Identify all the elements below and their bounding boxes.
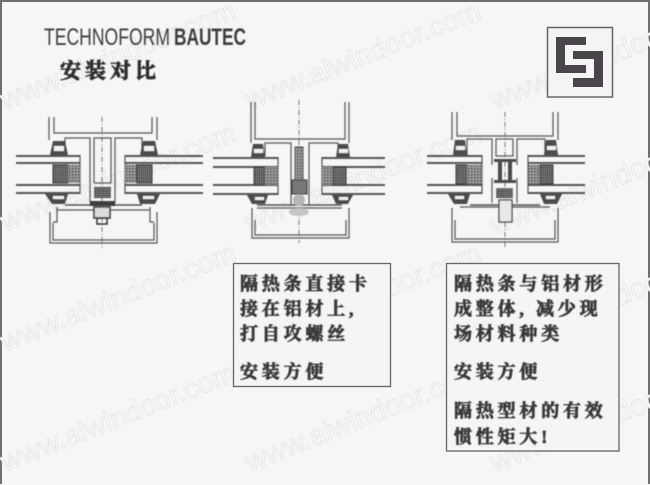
- text box: integrated profile note: 成整体, 减少现: [454, 298, 601, 319]
- glass panels: [427, 156, 585, 193]
- watermarks: www.alwindoor.com: [0, 117, 240, 239]
- text box: screw-fixed note: 接在铝材上,: [240, 299, 357, 319]
- glass panels: [16, 156, 203, 193]
- bolt and clip: [94, 187, 111, 198]
- thermal break bars: [494, 159, 516, 183]
- upper mullion: [251, 102, 349, 190]
- centre line: [298, 100, 300, 243]
- centre line: [504, 112, 506, 247]
- text box: integrated profile note: 惯性矩大!: [454, 427, 551, 447]
- watermarks: www.alwindoor.com: [240, 117, 485, 239]
- diagram: middle section, self-tapping screw: [213, 100, 385, 243]
- self-tapping screw: [295, 147, 303, 180]
- lower profile and cover: [452, 178, 558, 242]
- title: TECHNOFORM BAUTEC: BAUTEC: [174, 24, 246, 51]
- insulating spacers: [456, 165, 467, 184]
- text box: integrated profile note: [446, 264, 619, 451]
- gaskets: [247, 144, 353, 204]
- upper mullion: [49, 117, 157, 203]
- heading: installation comparison: 安装对比: [60, 59, 160, 83]
- text box: screw-fixed note: 安装方便: [240, 362, 327, 382]
- diagram: right section, integrated thermal break: [427, 112, 585, 247]
- title: TECHNOFORM BAUTEC: TECHNOFORM: [44, 24, 170, 51]
- glass panels: [213, 158, 385, 194]
- insulating spacers: [53, 165, 68, 183]
- icon: company logo: [548, 28, 612, 97]
- bolt and clip: [496, 188, 513, 198]
- diagram: left section, T-profile bolted: [16, 117, 203, 248]
- pressure plate and cover: [257, 204, 342, 206]
- upper mullion: [452, 112, 558, 165]
- text box: integrated profile note: 安装方便: [454, 362, 541, 382]
- gaskets: [45, 141, 160, 204]
- insulating spacers: [254, 167, 265, 185]
- watermarks: www.alwindoor.com: [0, 357, 240, 479]
- text box: screw-fixed note: 隔热条直接卡: [240, 274, 371, 294]
- watermarks: www.alwindoor.com: [240, 237, 485, 359]
- centre line: [101, 117, 103, 248]
- text box: screw-fixed note: [234, 264, 390, 386]
- watermarks: www.alwindoor.com: [240, 357, 485, 479]
- pressure plate and cover: [53, 207, 154, 222]
- watermarks: www.alwindoor.com: [0, 237, 240, 359]
- text box: integrated profile note: 隔热型材的有效: [454, 401, 607, 421]
- text box: integrated profile note: 场材料种类: [454, 323, 563, 344]
- text box: integrated profile note: 隔热条与铝材形: [454, 274, 607, 294]
- gaskets: [448, 140, 562, 204]
- text box: screw-fixed note: 打自攻螺丝: [240, 324, 349, 344]
